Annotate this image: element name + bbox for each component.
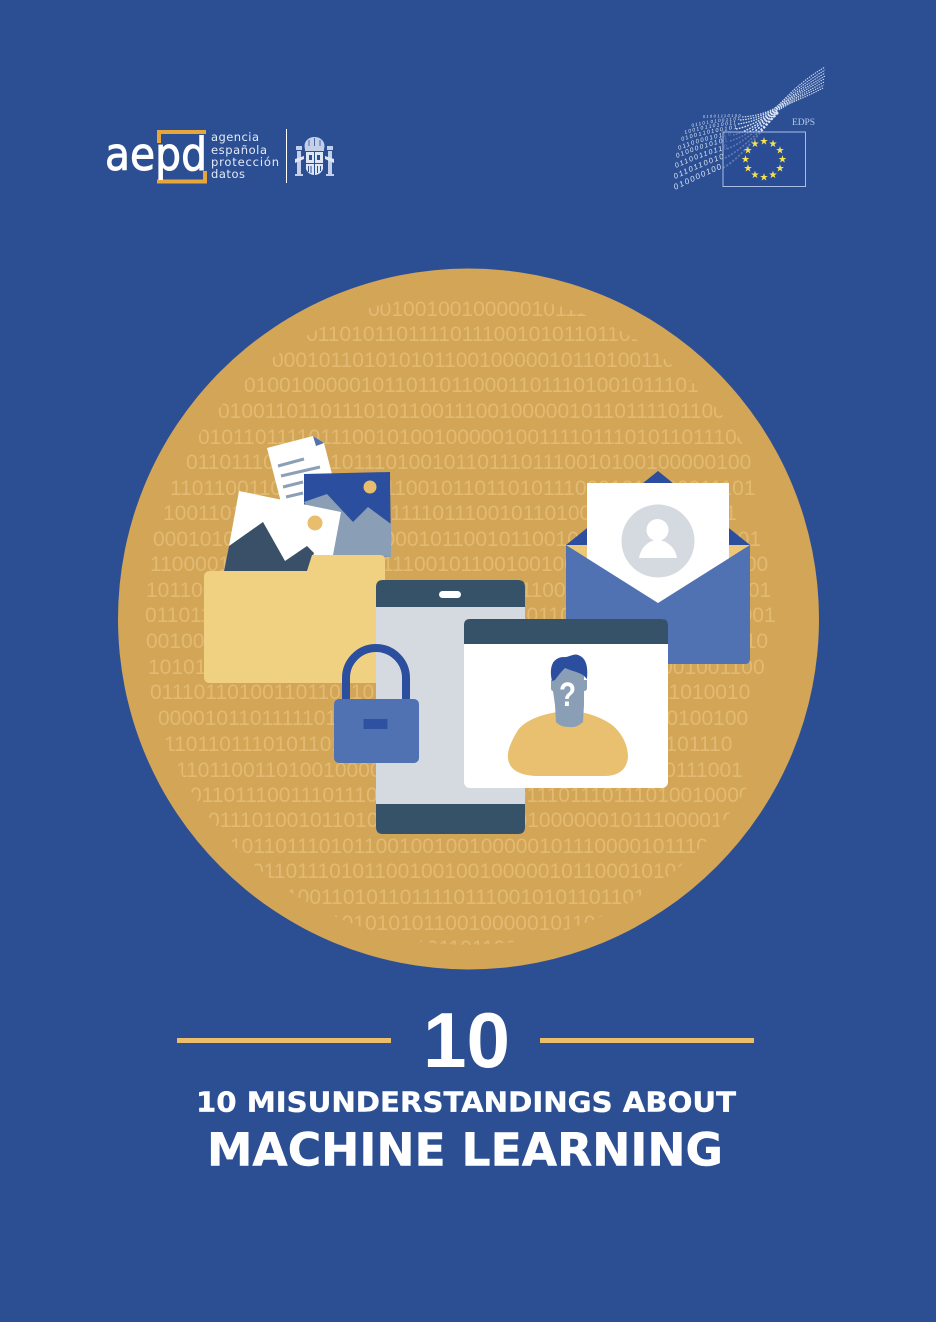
binary code pattern: 11011001101001000001001011011011011001011100111001 [176, 759, 743, 782]
lock shackle [346, 648, 406, 702]
binary code pattern: 01001000001011011011000110111010010111010 [244, 374, 710, 397]
binary wave: 011000010110100 [678, 131, 731, 150]
EU flag: ★ [760, 136, 769, 148]
number 10: 10 [423, 996, 510, 1084]
title rule: left [177, 1038, 391, 1043]
binary code pattern: 101010101100100000101101011 [330, 912, 641, 935]
main title: MACHINE LEARNING [207, 1124, 723, 1176]
binary code pattern: 01101101011011010011011101100101110110010111001101101001 [145, 604, 776, 627]
binary code pattern [145, 298, 801, 960]
EU flag: ★ [741, 154, 750, 166]
envelope flap [566, 471, 750, 545]
infographic cover page [107, 66, 826, 1166]
phone body [376, 580, 525, 834]
binary wave: 010000100 [674, 164, 721, 190]
person head [551, 662, 587, 727]
icon: yellow folder [204, 555, 385, 683]
logo: EDPS [674, 66, 826, 190]
binary code pattern: 00010101100101100100000101100101100100000101110101101 [153, 528, 761, 551]
letter [587, 483, 729, 605]
EU flag: ★ [751, 170, 760, 181]
EU flag: ★ [744, 146, 753, 156]
binary code pattern: 1011000101011001011011101001101011100101101001011100101 [146, 579, 771, 602]
logo bracket [157, 132, 206, 182]
binary code pattern: 1011011000 [415, 937, 529, 960]
binary code pattern: 01101110110011011101001011011101110010100100000100 [186, 451, 751, 474]
EU flag: ★ [769, 170, 778, 181]
subtitle: 10 MISUNDERSTANDINGS ABOUT [196, 1086, 736, 1118]
binary code pattern: 01001101101110101100111001000001011011110110011 [218, 400, 747, 423]
keyhole [364, 719, 388, 729]
EU flag: ★ [769, 139, 778, 150]
binary code pattern: 010110111101110010100100000100111101110101101110010 [198, 426, 772, 449]
binary code pattern: 10011010110111101110010101101101101110 [286, 886, 711, 909]
logo agency name: agencia [211, 130, 259, 144]
EU flag: ★ [776, 164, 785, 174]
illustration: smartphone [376, 580, 525, 834]
question mark: ? [559, 676, 576, 714]
binary code pattern: 0110101101111011100101011011011010 [306, 323, 688, 346]
person hair [551, 655, 587, 681]
binary code pattern: 100110101101001101101111011100101101001101111000101 [163, 502, 737, 525]
EU flag: ★ [776, 146, 785, 156]
illustration: padlock [334, 648, 419, 763]
binary code pattern: 11011011101011010010110100101101001011000000101110 [164, 733, 732, 756]
window title bar [464, 619, 668, 644]
illustration: profile window [464, 619, 668, 788]
EU flag: ★ [760, 172, 769, 184]
icon: avatar [622, 504, 694, 578]
binary code pattern: 1011011101011001001001000001011100001011100101010 [230, 835, 790, 858]
EU flag: ★ [751, 139, 760, 150]
phone speaker [439, 591, 461, 598]
window body [464, 619, 668, 788]
logo wordmark: aepd [105, 128, 207, 181]
lock body [334, 699, 419, 763]
binary code pattern: 0110111001110111001110101010101110111011101001000001 [190, 784, 774, 807]
binary code pattern: 0010010110110110110110100110111001010011011011100110010 [146, 630, 768, 653]
binary code pattern: 00010110101010110010000010110100110111 [272, 349, 706, 372]
icon: white photo [224, 491, 341, 571]
phone top bar [376, 580, 525, 607]
title rule: right [540, 1038, 754, 1043]
person shoulders [508, 712, 628, 776]
phone bottom bar [376, 804, 525, 834]
logo: aepd agency [105, 128, 334, 183]
illustration: envelope [566, 471, 750, 664]
EU flag: ★ [778, 154, 787, 166]
binary code pattern: 01110110100110110110101100101101001011100110011010010 [150, 681, 750, 704]
binary wave [674, 66, 826, 190]
binary code pattern: 0000101101111101100101010110110101011100110010100100 [158, 707, 748, 730]
EDPS label: EDPS [792, 118, 815, 128]
icon: text document [267, 436, 340, 518]
icon: blue photo [304, 472, 391, 557]
gold circle background [118, 268, 819, 970]
binary code pattern: 1101100110111000010110010110110101110001011100011101 [170, 477, 756, 500]
binary code pattern: 110000100100100000101110010110010010000010111011100100 [150, 553, 768, 576]
binary code pattern: 0111010010110100010010110110100000010111000010111010 [208, 809, 801, 832]
binary code pattern: 101011011001010110111010010110100101101001011001001100 [148, 656, 765, 679]
binary code pattern: 011011101011001001001000001011000101011010 [252, 860, 733, 883]
EU flag: ★ [744, 164, 753, 174]
illustration: folder with documents [204, 436, 391, 683]
envelope body [566, 545, 750, 664]
EU flag [723, 132, 806, 186]
logo agency name: protección [211, 155, 279, 169]
icon: coat of arms of Spain [295, 137, 334, 176]
logo agency name [211, 130, 279, 181]
logo agency name: española [211, 143, 267, 157]
binary code pattern: 00100100100000101110 [368, 298, 598, 321]
logo agency name: datos [211, 167, 245, 181]
